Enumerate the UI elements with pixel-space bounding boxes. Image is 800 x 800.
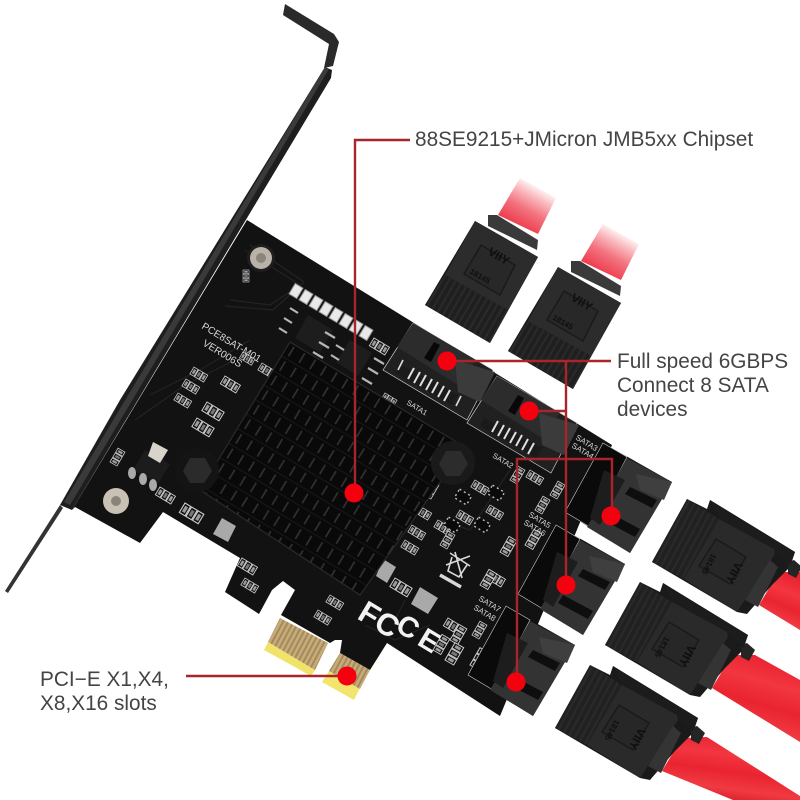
- SATA cable: top left: VIIY: [486, 244, 512, 268]
- PCB board markings: SATA1: [405, 398, 429, 417]
- SATA cable: top left: 18145: [468, 267, 492, 286]
- callout: SATA speed: Full speed 6GBPS: [617, 350, 788, 373]
- PCB board markings: SATA2: [491, 451, 515, 470]
- PCB traces: [135, 245, 510, 640]
- PCB board: [72, 220, 612, 716]
- SATA cable: lower 2: VIIY: [676, 643, 699, 669]
- PCB board markings: SATA6: [522, 518, 548, 538]
- FCC and CE logos: FC: [352, 594, 406, 645]
- SATA cable: lower 2: 18145: [653, 635, 671, 659]
- SATA cable: lower 1: [652, 499, 800, 630]
- FCC and CE logos: E: [412, 623, 445, 660]
- callout: SATA speed: [438, 350, 788, 692]
- SATA port 2: [467, 376, 579, 473]
- SATA cable: top right: 18145: [551, 313, 575, 332]
- SATA cable: lower 3: VIIY: [626, 726, 649, 752]
- IC chips: [279, 308, 384, 384]
- callout: PCI-E slots: X8,X16 slots: [40, 692, 157, 715]
- PCB transistors: [443, 485, 505, 533]
- callout: SATA speed: devices: [617, 398, 688, 421]
- SATA port 1: [383, 323, 495, 420]
- PCB board markings: [199, 321, 600, 623]
- PCB board markings: SATA3: [574, 433, 600, 453]
- mounting bracket: [5, 4, 339, 593]
- FCC and CE logos: C: [390, 609, 425, 647]
- callout: chipset: 88SE9215+JMicron JMB5xx Chipset: [415, 128, 753, 151]
- FCC and CE logos: [352, 594, 445, 660]
- gold edge connector: [264, 618, 370, 700]
- recycle bin symbol: [440, 552, 470, 587]
- mounting screws: [103, 244, 275, 514]
- status LED row: [289, 284, 373, 340]
- SATA cable: top left: [425, 178, 556, 343]
- PCB board markings: SATA5: [527, 510, 553, 530]
- PCB board markings: SATA4: [570, 441, 596, 461]
- SATA cable: lower 3: [555, 665, 800, 800]
- SATA port 5 and 6: [518, 525, 625, 635]
- callout: SATA speed: Connect 8 SATA: [617, 374, 769, 397]
- SATA cable: lower 1: VIIY: [723, 560, 746, 586]
- SATA cable: top right: [508, 224, 639, 389]
- PCB board markings: VER006S: [200, 338, 244, 370]
- PCB small components: [110, 270, 565, 670]
- PCB board markings: PCE8SAT-M01: [199, 321, 263, 365]
- PCB board markings: SATA8: [472, 603, 498, 623]
- callout: PCI-E slots: PCI−E X1,X4,: [40, 668, 169, 691]
- SATA port 7 and 8: [468, 606, 575, 716]
- silver components: [213, 518, 438, 614]
- SATA cable: lower 3: 18145: [603, 718, 621, 742]
- voltage regulator: [128, 442, 170, 491]
- SATA cable: lower 1: 18145: [700, 552, 718, 576]
- SATA port 3 and 4: [565, 443, 672, 553]
- callout: PCI-E slots: [40, 666, 356, 715]
- PCB board markings: SATA7: [477, 594, 503, 614]
- SATA cable: top right: VIIY: [568, 290, 595, 314]
- heatsink: [175, 342, 475, 595]
- SATA cable: lower 2: [605, 582, 800, 742]
- callout: chipset: [344, 128, 753, 502]
